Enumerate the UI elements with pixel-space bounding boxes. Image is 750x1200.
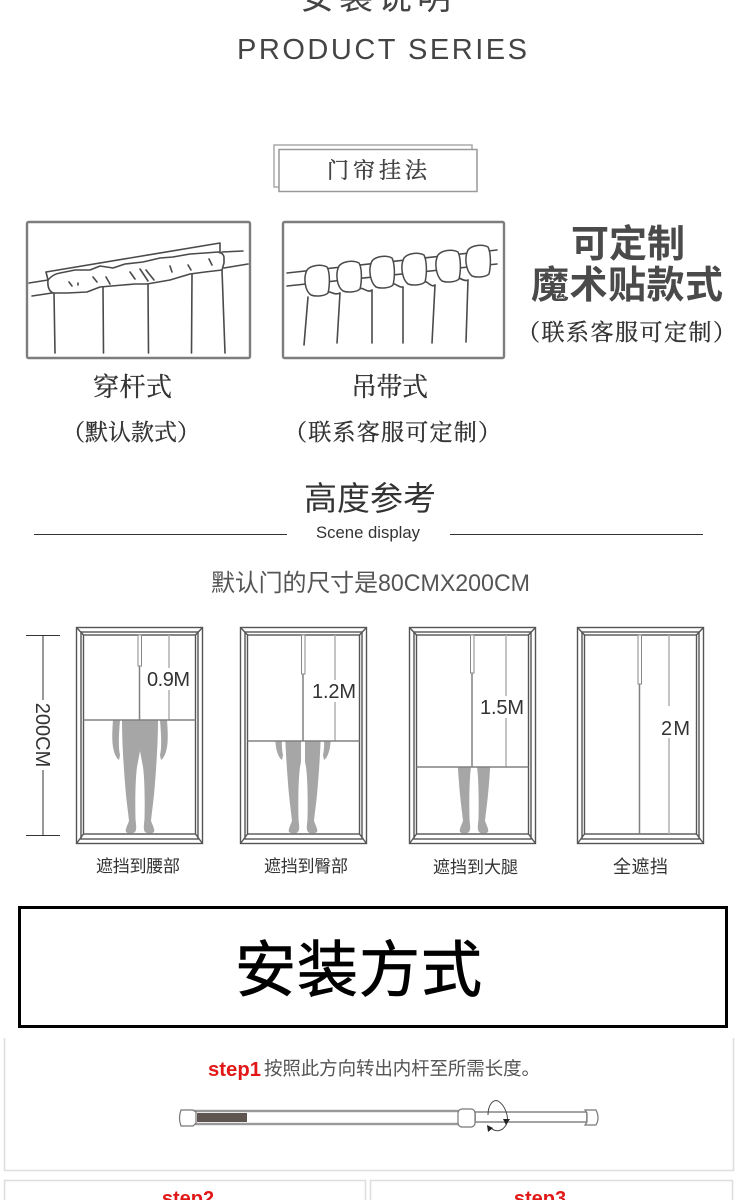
label: 吊带式: 吊带式 [351,373,428,402]
door diagram: 1.2M: 1.2M [312,681,356,703]
callout: custom velcro style [517,224,736,345]
heading card: 门帘挂法: 门帘挂法 [327,158,428,183]
dimension: 200CM: 200CM [31,703,53,767]
label: 穿杆式: 穿杆式 [93,373,172,402]
caption: 全遮挡: 全遮挡 [613,857,668,877]
panel: step 2 [4,1180,366,1200]
heading: 高度参考: 高度参考 [304,480,436,517]
text: default door size [211,570,530,597]
label: 默认款式: （默认款式） [62,420,200,445]
panel: step 3 [370,1180,732,1200]
door diagram: 1.2M [240,628,366,844]
door diagram: 0.9M [76,628,202,844]
callout: custom velcro style: 可定制 [571,224,685,266]
panel: step 1: step1 [208,1059,261,1081]
subtitle: PRODUCT SERIES: PRODUCT SERIES [237,34,527,66]
label: 联系客服可定制: （联系客服可定制） [284,420,501,445]
callout: custom velcro style: （联系客服可定制） [517,320,736,345]
banner: 安装方式: 安装方式 [235,936,482,1004]
door diagram: 2M [578,628,704,844]
panel: step 1 [4,1038,734,1170]
caption: 遮挡到腰部: 遮挡到腰部 [96,857,180,876]
door diagram: 2M: 2M [661,718,690,740]
text: default door size: 默认门的尺寸是 [211,570,378,597]
door diagram: 1.5M: 1.5M [480,697,524,719]
panel: tab-top sketch [283,222,504,358]
panel: rod-pocket sketch [27,222,250,358]
caption: 遮挡到臀部: 遮挡到臀部 [264,857,348,876]
banner: 安装方式 [20,908,726,1026]
panel: step 1: 按照此方向转出内杆至所需长度。 [264,1058,540,1079]
text: default door size: 80CMX200CM [378,570,530,597]
icon: tension rod [180,1101,598,1132]
door diagram: 0.9M: 0.9M [147,669,190,691]
callout: custom velcro style: 魔术贴款式 [531,265,723,307]
heading card: 门帘挂法 [274,145,477,192]
door diagram: 1.5M [410,628,536,844]
caption: 遮挡到大腿: 遮挡到大腿 [433,858,518,877]
subheading: Scene display: Scene display [316,523,420,542]
dimension: 200CM [26,635,60,836]
